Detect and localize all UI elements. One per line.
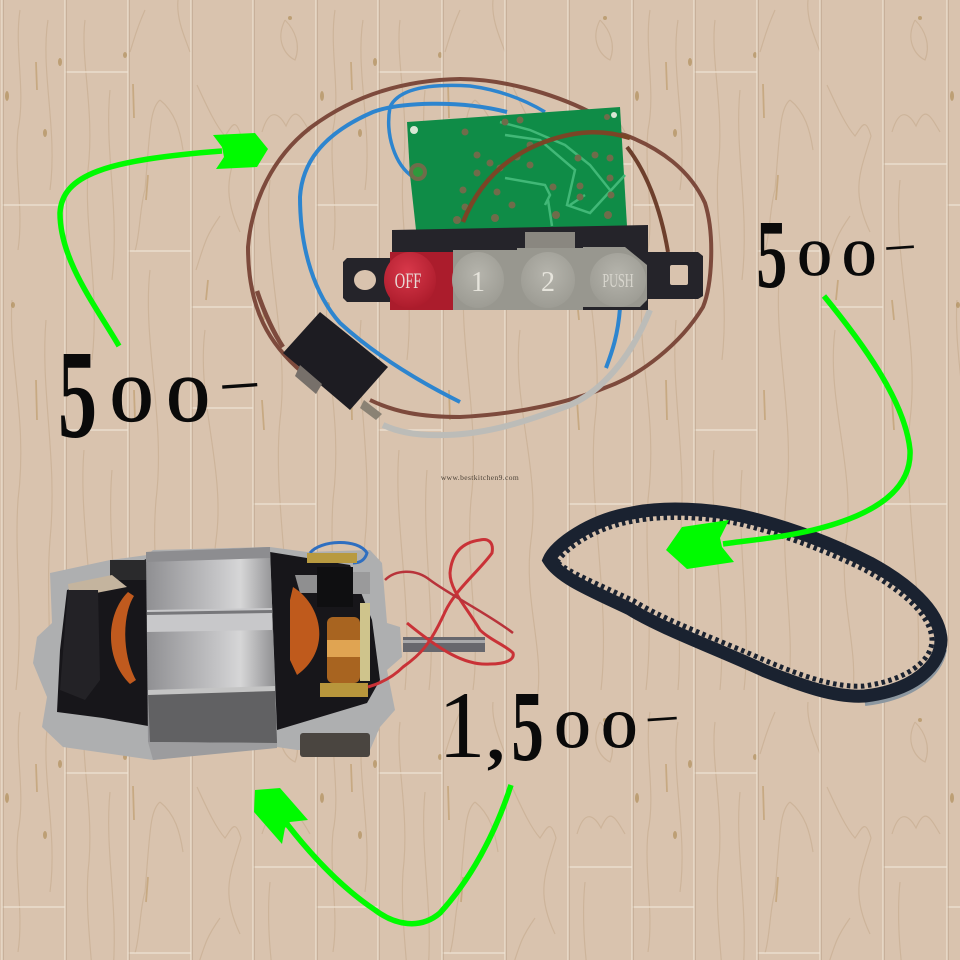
- price: control board: 5: [58, 325, 97, 465]
- commutator: [317, 567, 370, 683]
- timing belt: [549, 509, 945, 704]
- dark interior left: [57, 558, 148, 726]
- belt shadow: [865, 650, 945, 704]
- switch plate: [343, 225, 703, 310]
- control board: circuit board, switch panel and wires: [248, 79, 711, 435]
- aluminium frame: [33, 547, 402, 760]
- button: PUSH: PUSH: [602, 269, 634, 292]
- right copper winding: [290, 587, 319, 675]
- white wire: [383, 310, 650, 435]
- button: 2: 2: [541, 267, 555, 298]
- blue wire: to LED: [389, 85, 545, 177]
- red wires: [368, 540, 513, 687]
- price: control board: 00: [110, 363, 223, 435]
- price: belt: -: [881, 224, 919, 265]
- brown wire over board: [463, 132, 630, 222]
- price: belt: 00: [797, 230, 887, 286]
- brown wire: outer loop: [248, 79, 590, 373]
- price: motor: 00: [555, 701, 648, 759]
- belt teeth: [557, 517, 932, 686]
- watermark: www.bestkitchen9.com: [441, 473, 519, 482]
- left fan: [60, 590, 100, 700]
- circuit board: [407, 107, 627, 230]
- top terminal with blue wire: [307, 542, 367, 563]
- micro switch: [283, 312, 388, 420]
- brown wire: inner right: [627, 147, 668, 252]
- price: motor: 5: [511, 671, 544, 783]
- price: control board: [58, 325, 264, 465]
- brown wire: lower loop: [370, 131, 711, 417]
- belt body: [549, 509, 941, 696]
- blue wire: short right: [606, 308, 620, 368]
- arrow: to motor: [254, 785, 511, 924]
- button: 1: 1: [471, 267, 485, 298]
- button: 2: [521, 252, 575, 308]
- price: motor: 1: [438, 672, 486, 778]
- button: OFF: [384, 252, 436, 308]
- price: control board: -: [215, 355, 264, 408]
- dark interior right: [270, 552, 380, 730]
- brown wire: stub: [257, 291, 283, 347]
- blue wire: long loop: [300, 104, 507, 402]
- motor: [33, 540, 513, 760]
- arrow: to belt: [666, 296, 910, 569]
- price: belt: 5: [756, 201, 787, 308]
- bottom fixture: [300, 733, 370, 757]
- button: 1: [452, 252, 504, 308]
- arrow: to control board: [60, 133, 268, 346]
- button: OFF: OFF: [395, 269, 421, 294]
- price: motor: -: [642, 694, 682, 737]
- price: motor: ,: [487, 699, 504, 776]
- price: motor: [438, 671, 682, 783]
- shaft: [403, 637, 485, 652]
- steel laminated core: [146, 547, 277, 760]
- left copper winding: [111, 592, 136, 684]
- price: belt: [756, 201, 919, 308]
- button: PUSH: [590, 253, 646, 307]
- bottom terminal: [320, 683, 368, 697]
